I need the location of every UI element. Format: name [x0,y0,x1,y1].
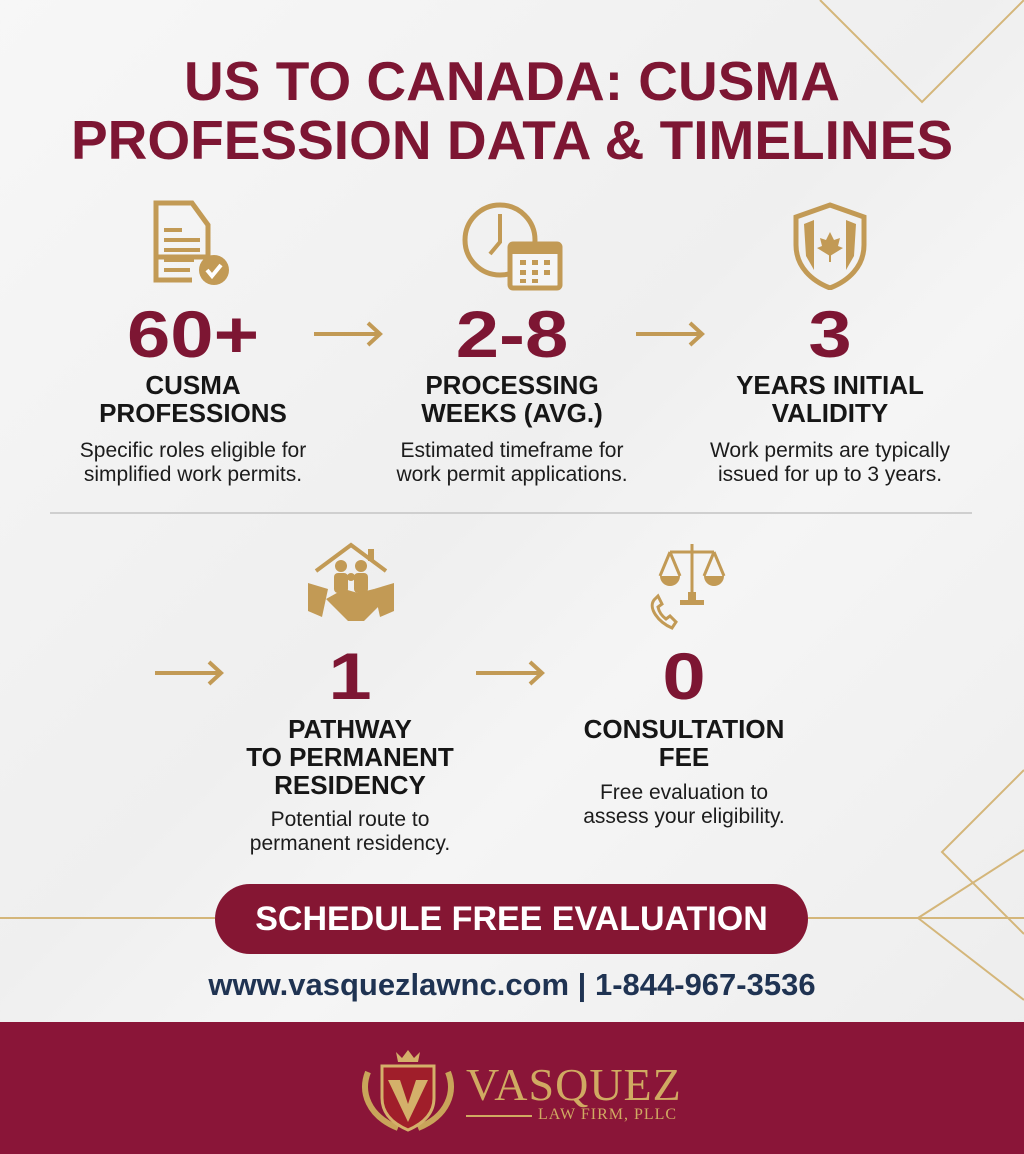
title: US TO CANADA: CUSMA [184,50,840,112]
stat: 3: VALIDITY [772,398,888,428]
stat: 3: issued for up to 3 years. [718,463,942,486]
logo text: VASQUEZ [466,1059,682,1110]
contact line: www.vasquezlawnc.com | 1-844-967-3536 [208,967,816,1002]
button: schedule free evaluation: SCHEDULE FREE EVALUATION [255,900,768,938]
stat: 2-8: work permit applications. [396,463,628,486]
stat: 1: Potential route to [271,808,429,831]
stat: 0: assess your eligibility. [583,805,785,828]
stat: 60+ [80,297,306,486]
stat: 3: YEARS INITIAL [736,370,924,400]
stat: 2-8 [396,297,628,486]
stat: 1: TO PERMANENT [246,742,454,772]
stat: 0: CONSULTATION [584,714,784,744]
stat: 60+: CUSMA [145,370,241,400]
footer [0,1022,1024,1154]
stat: 2-8: WEEKS (AVG.) [421,398,603,428]
stat: 60+: 60+ [127,297,259,371]
stat: 0: 0 [662,639,706,713]
stat: 1: RESIDENCY [274,770,426,800]
stat: 2-8: 2-8 [456,297,568,371]
stat: 60+: PROFESSIONS [99,398,287,428]
arrow [636,322,705,346]
stat: 3: 3 [808,297,852,371]
arrow [476,660,545,686]
icon: house family handshake [308,542,394,621]
stat: 0 [583,639,785,828]
stat: 1 [246,639,454,855]
footer: LAW FIRM, PLLC [538,1106,677,1123]
arrow [314,322,383,346]
icon: scales and phone [650,544,726,630]
stat: 0: FEE [659,742,709,772]
stat: 60+: Specific roles eligible for [80,439,306,462]
icon: shield with maple leaf [794,202,866,290]
button: schedule free evaluation [215,884,808,954]
title [71,50,953,171]
icon: document with check [154,200,229,285]
arrow [155,660,224,686]
stat: 2-8: PROCESSING [425,370,599,400]
stat: 1: PATHWAY [288,714,412,744]
stat: 60+: simplified work permits. [84,463,302,486]
stat: 1: 1 [328,639,372,713]
logo emblem [362,1050,454,1132]
stat: 2-8: Estimated timeframe for [401,439,623,462]
title: PROFESSION DATA & TIMELINES [71,109,953,171]
stat: 3: Work permits are typically [710,439,950,462]
stat: 1: permanent residency. [250,832,450,855]
stat: 0: Free evaluation to [600,781,768,804]
stat: 3 [710,297,950,486]
icon: clock and calendar [462,202,562,290]
